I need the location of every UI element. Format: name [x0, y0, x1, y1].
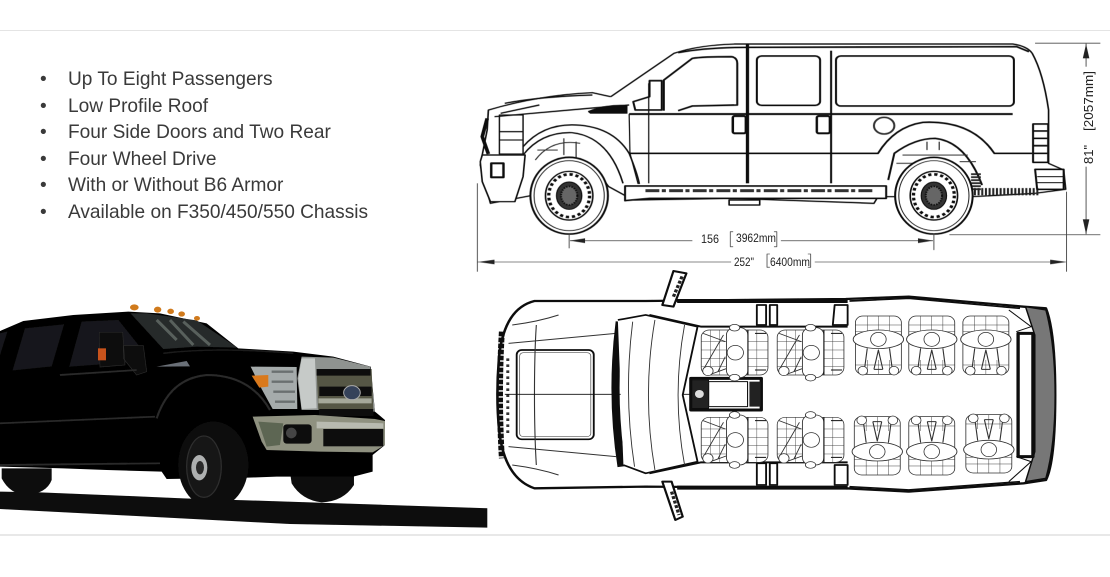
- hood panel: [517, 350, 594, 439]
- chrome grille surround: [297, 357, 375, 412]
- truck body: [0, 312, 385, 479]
- overall length dimension label: 252": [734, 257, 754, 269]
- body moulding and arch: [630, 122, 1032, 153]
- wheelbase dimension label: 156: [701, 234, 719, 246]
- front wheel: [530, 157, 608, 234]
- centre line: [505, 393, 698, 396]
- roof band: [678, 47, 1029, 183]
- vehicle outline: [497, 297, 1055, 492]
- door handles: [733, 116, 746, 133]
- front wheel well detail: [535, 138, 580, 160]
- wheelbase metric label: 3962mm: [736, 233, 776, 245]
- rear hatch: [1026, 307, 1055, 482]
- dimension arrowheads: [478, 44, 1089, 264]
- side elevation drawing: [477, 43, 1100, 272]
- centre console: [691, 378, 761, 410]
- right front wheel: [290, 472, 354, 502]
- windshield and cowl: [615, 322, 622, 467]
- dimension lines: [477, 43, 1100, 272]
- grille: [317, 369, 373, 410]
- feature list: Low Profile Roof: [68, 96, 208, 116]
- plan view drawing: [497, 271, 1055, 520]
- rear wheel: [2, 468, 52, 495]
- body crease highlight: [0, 370, 160, 465]
- height metric dimension label: [2057mm]: [1081, 71, 1096, 131]
- beltline: [629, 111, 1013, 117]
- door pillars: [757, 305, 848, 485]
- far rear window: [0, 332, 7, 355]
- upper rear seats: [853, 316, 904, 375]
- feature list: Available on F350/450/550 Chassis: [68, 202, 368, 222]
- rear bumper and lower panel: [974, 181, 1039, 203]
- feature list: With or Without B6 Armor: [68, 175, 283, 196]
- hood highlight and badge: [157, 361, 190, 367]
- side step: [625, 186, 886, 201]
- mirror: [633, 81, 662, 110]
- body outline: [480, 44, 1066, 203]
- truck photograph with shadow: [0, 304, 487, 528]
- hood contours: [509, 315, 616, 475]
- tail light: [1033, 124, 1048, 162]
- ground shadow: [0, 492, 487, 528]
- fender arch: [157, 375, 270, 418]
- front side window: [69, 320, 138, 367]
- middle window: [757, 56, 820, 105]
- windshield: [131, 313, 237, 349]
- top divider line: [0, 30, 1110, 31]
- feature list: [40, 69, 368, 222]
- second row seats: [701, 412, 768, 468]
- height dimension label: 81": [1081, 145, 1096, 164]
- front wheel: [178, 422, 248, 508]
- bottom divider line: [0, 534, 1110, 536]
- rear wheel well detail: [896, 142, 976, 163]
- amber roof lights: [130, 304, 200, 321]
- fuel door: [874, 117, 894, 134]
- rear wheel: [895, 157, 973, 234]
- side mirror: [99, 332, 147, 375]
- long rear window: [836, 56, 1014, 106]
- lower rear seats: [852, 416, 902, 475]
- feature list: Four Side Doors and Two Rear: [68, 122, 331, 143]
- mirrors: [662, 271, 686, 307]
- front end: [499, 115, 523, 154]
- overall length metric label: 6400mm: [770, 257, 810, 269]
- chrome bumper: [253, 415, 385, 452]
- front row seats: [701, 324, 768, 381]
- door window: [664, 57, 737, 111]
- feature list: Four Wheel Drive: [68, 148, 217, 170]
- rear side window: [13, 324, 64, 370]
- headlight: [251, 367, 297, 409]
- feature list: Up To Eight Passengers: [68, 69, 272, 90]
